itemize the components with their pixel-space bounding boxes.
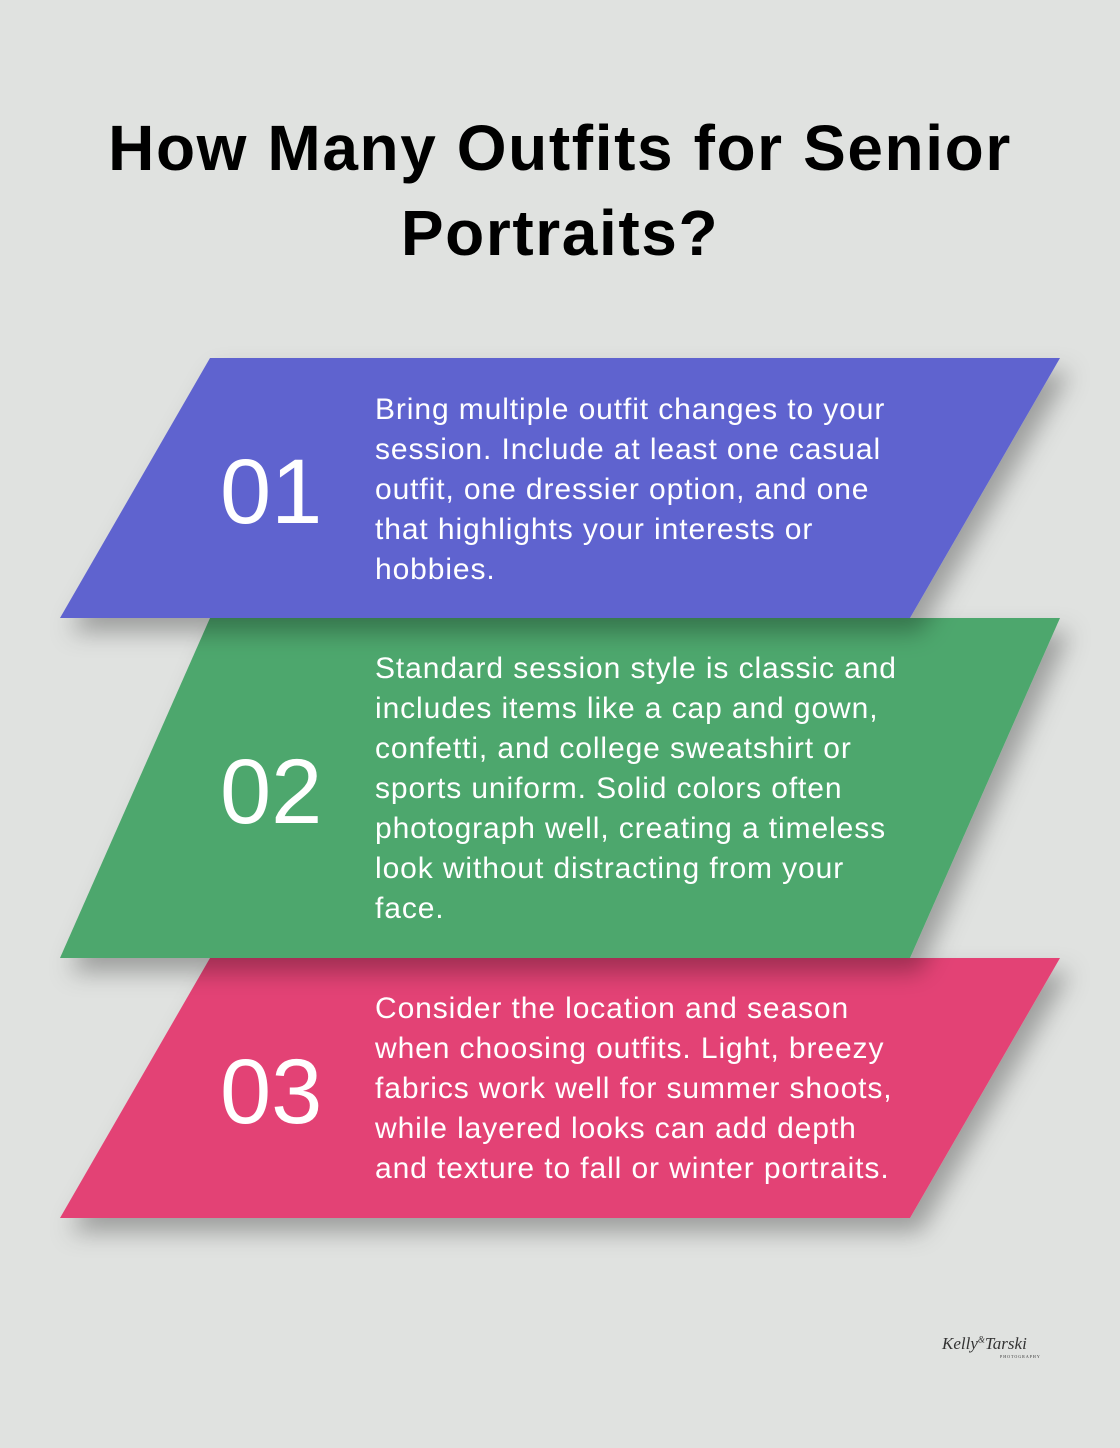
text 01: Bring multiple outfit changes to your: [375, 393, 885, 426]
number 03: 03: [220, 1041, 322, 1143]
text 03: Consider the location and season: [375, 992, 849, 1025]
panel 1 shape: [60, 358, 1060, 618]
text 02: confetti, and college sweatshirt or: [375, 732, 852, 765]
title: [108, 112, 1012, 269]
number 02: 02: [220, 741, 322, 843]
text 02: [375, 652, 897, 925]
text 03: when choosing outfits. Light, breezy: [375, 1032, 884, 1065]
logo signature: PHOTOGRAPHY: [1000, 1354, 1041, 1359]
text 01: [375, 393, 885, 586]
text 03: while layered looks can add depth: [375, 1112, 857, 1145]
number 01: 01: [220, 441, 322, 543]
text 03: fabrics work well for summer shoots,: [375, 1072, 893, 1105]
panel 3 shape: [60, 958, 1060, 1218]
text 01: that highlights your interests or: [375, 513, 813, 546]
text 02: photograph well, creating a timeless: [375, 812, 886, 845]
text 02: includes items like a cap and gown,: [375, 692, 878, 725]
text 03: [375, 992, 893, 1185]
logo signature: [942, 1334, 1041, 1359]
panel 2 shape: [60, 618, 1060, 958]
text 03: and texture to fall or winter portraits.: [375, 1152, 890, 1185]
text 01: hobbies.: [375, 553, 496, 586]
text 02: face.: [375, 892, 445, 925]
text 01: outfit, one dressier option, and one: [375, 473, 869, 506]
logo signature: Kelly&Tarski: [942, 1334, 1027, 1353]
text 02: Standard session style is classic and: [375, 652, 897, 685]
text 02: sports uniform. Solid colors often: [375, 772, 842, 805]
text 01: session. Include at least one casual: [375, 433, 881, 466]
text 02: look without distracting from your: [375, 852, 844, 885]
title: Portraits?: [401, 197, 719, 269]
title: How Many Outfits for Senior: [108, 112, 1012, 184]
